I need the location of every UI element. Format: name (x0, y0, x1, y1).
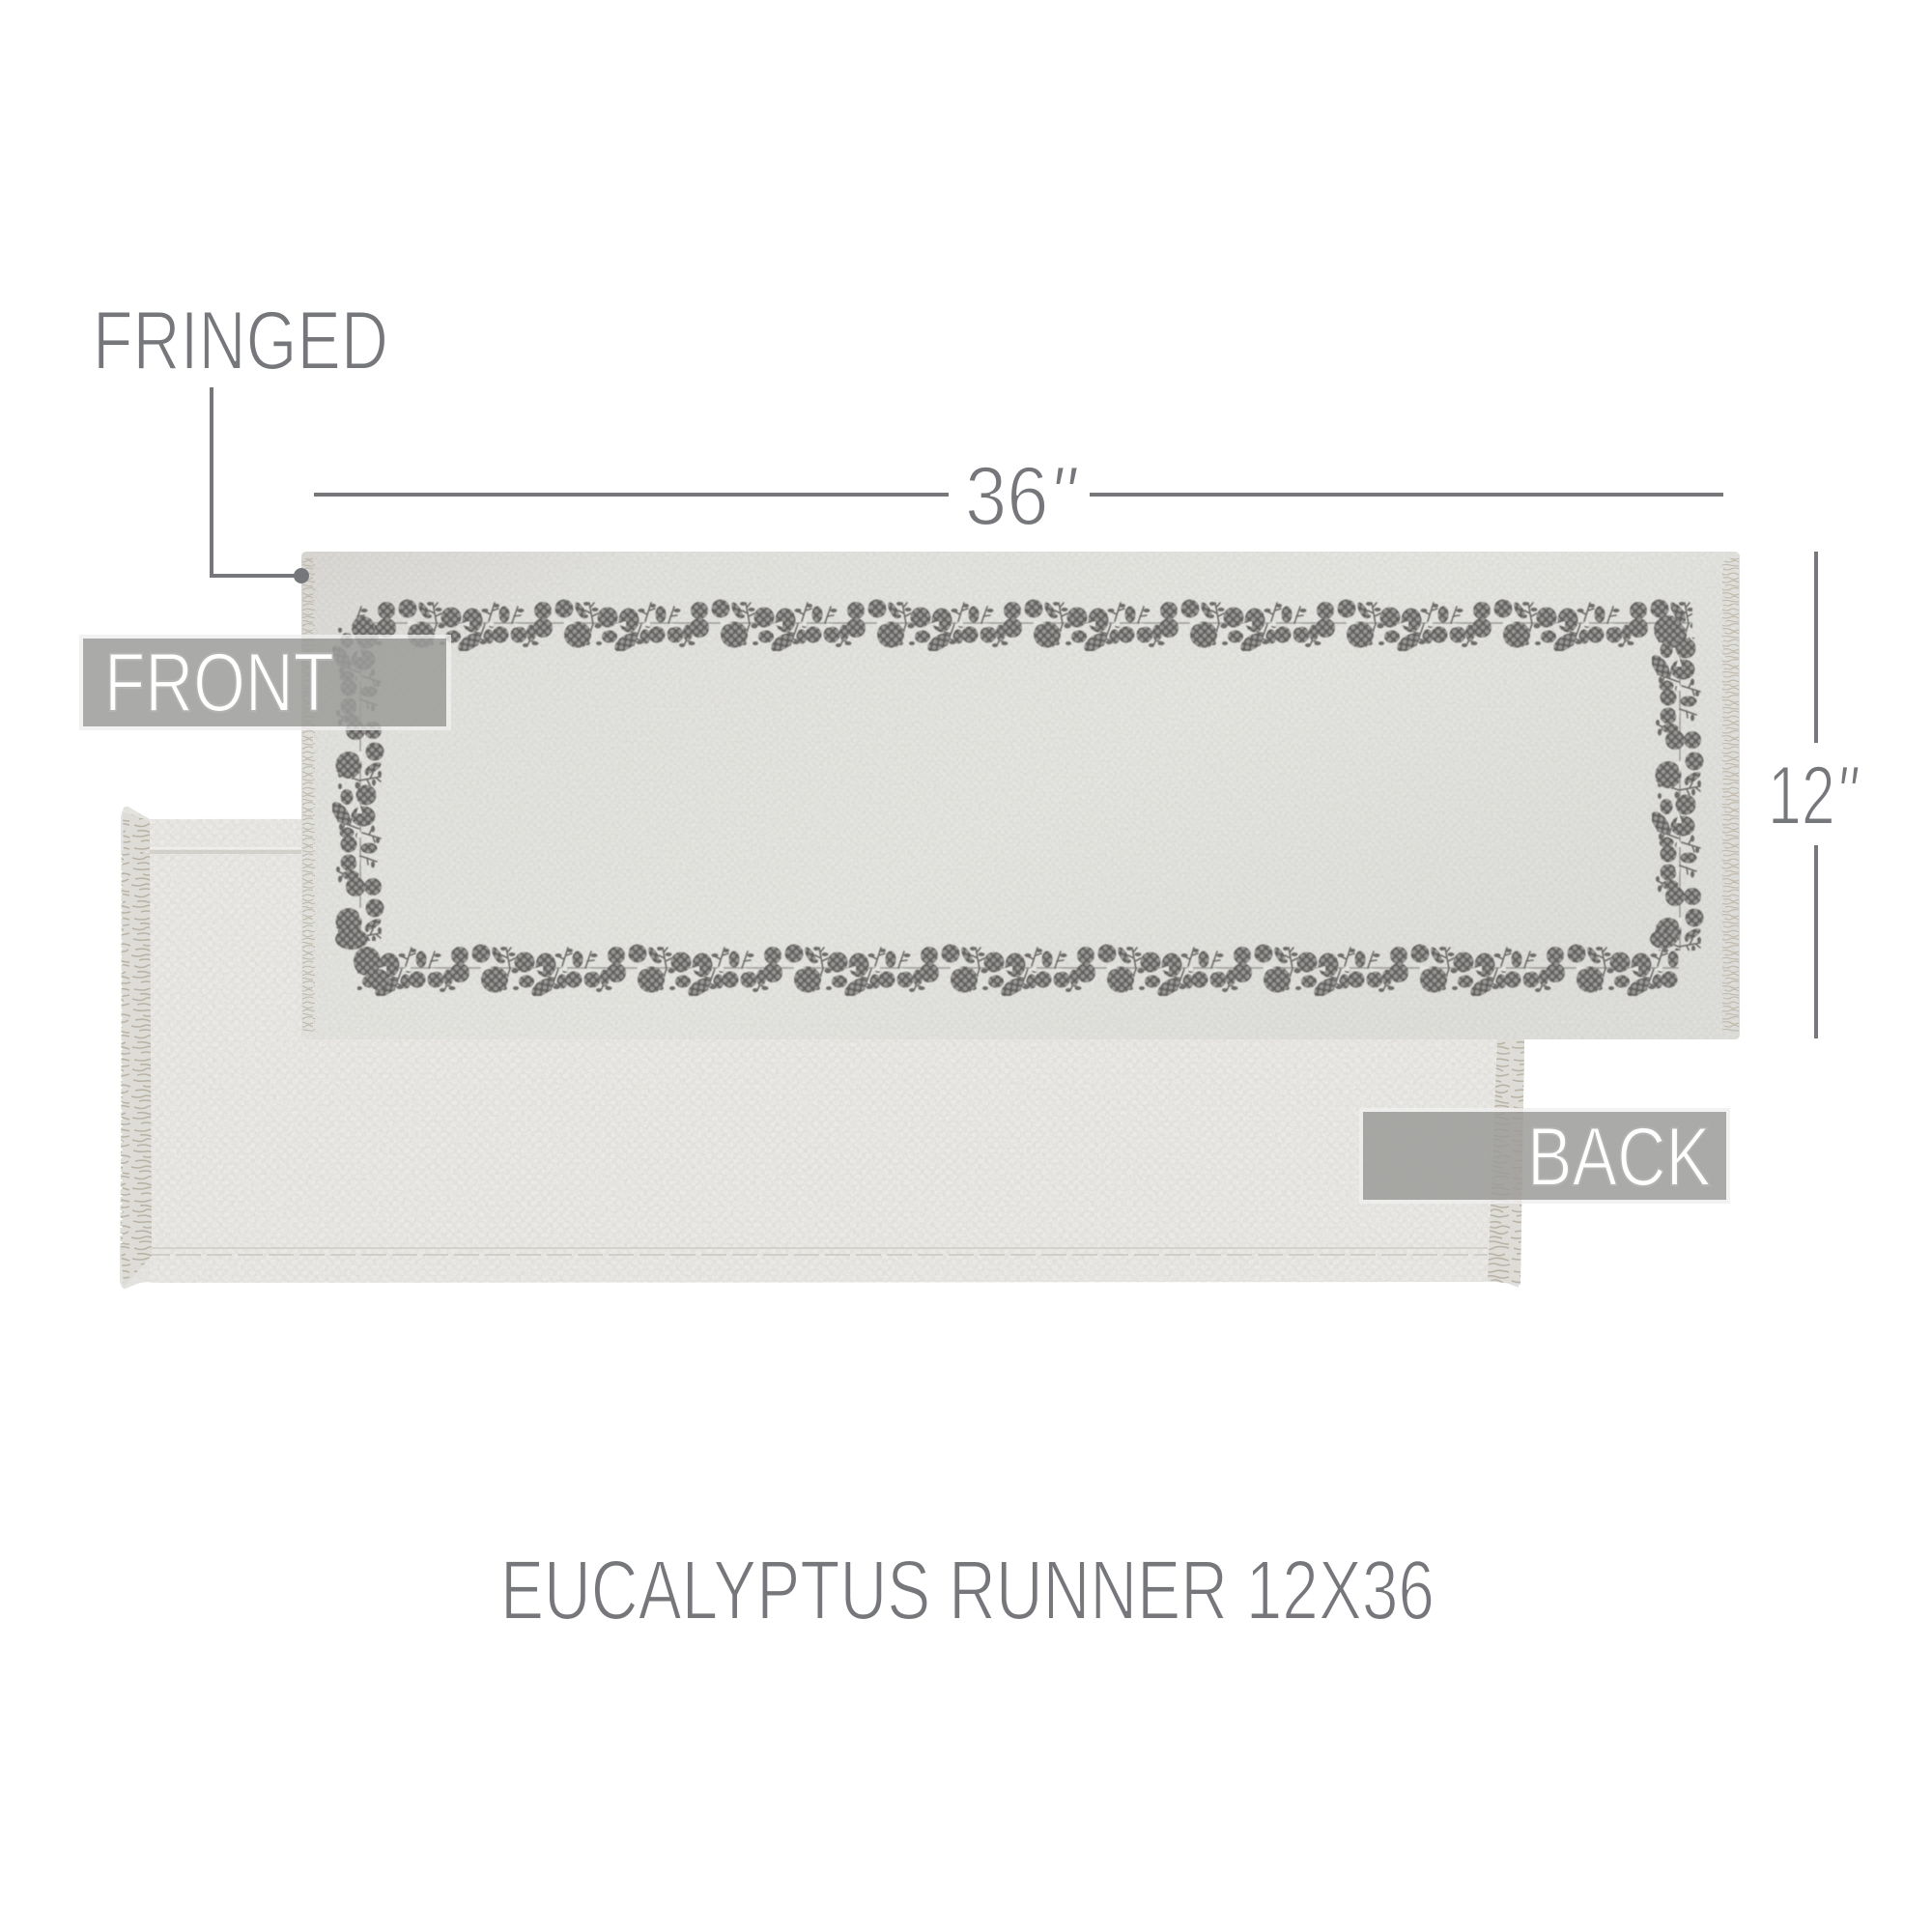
dimension: 36 inch width: 36" (965, 450, 1078, 543)
dimension: 36 inch width (314, 450, 1723, 543)
front left fringe (302, 558, 315, 1032)
wreath bottom (357, 942, 1679, 996)
wreath top (354, 597, 1692, 651)
title: EUCALYPTUS RUNNER 12X36 (500, 1544, 1435, 1637)
dimension: 12 inch height: 12" (1768, 750, 1860, 842)
wreath right (1652, 638, 1706, 951)
dimension: 12 inch height (1768, 552, 1860, 1038)
panel: front of runner (301, 552, 1740, 1039)
eucalyptus wreath (332, 597, 1706, 996)
callout label: FRINGED: FRINGED (93, 295, 388, 387)
label: BACK: BACK (1527, 1111, 1711, 1204)
back top hem seam (150, 848, 1256, 852)
back bottom hem seam (145, 1248, 1488, 1255)
wreath corner leaves (335, 602, 1689, 990)
front right fringe (1722, 558, 1739, 1032)
label: BACK (1359, 1108, 1730, 1204)
label: FRONT: FRONT (104, 637, 334, 729)
wreath left (332, 628, 386, 941)
leader line with dot (212, 387, 309, 583)
back left fringe (121, 811, 152, 1287)
back right fringe (1488, 1039, 1524, 1285)
panel: back of runner (120, 807, 1524, 1289)
